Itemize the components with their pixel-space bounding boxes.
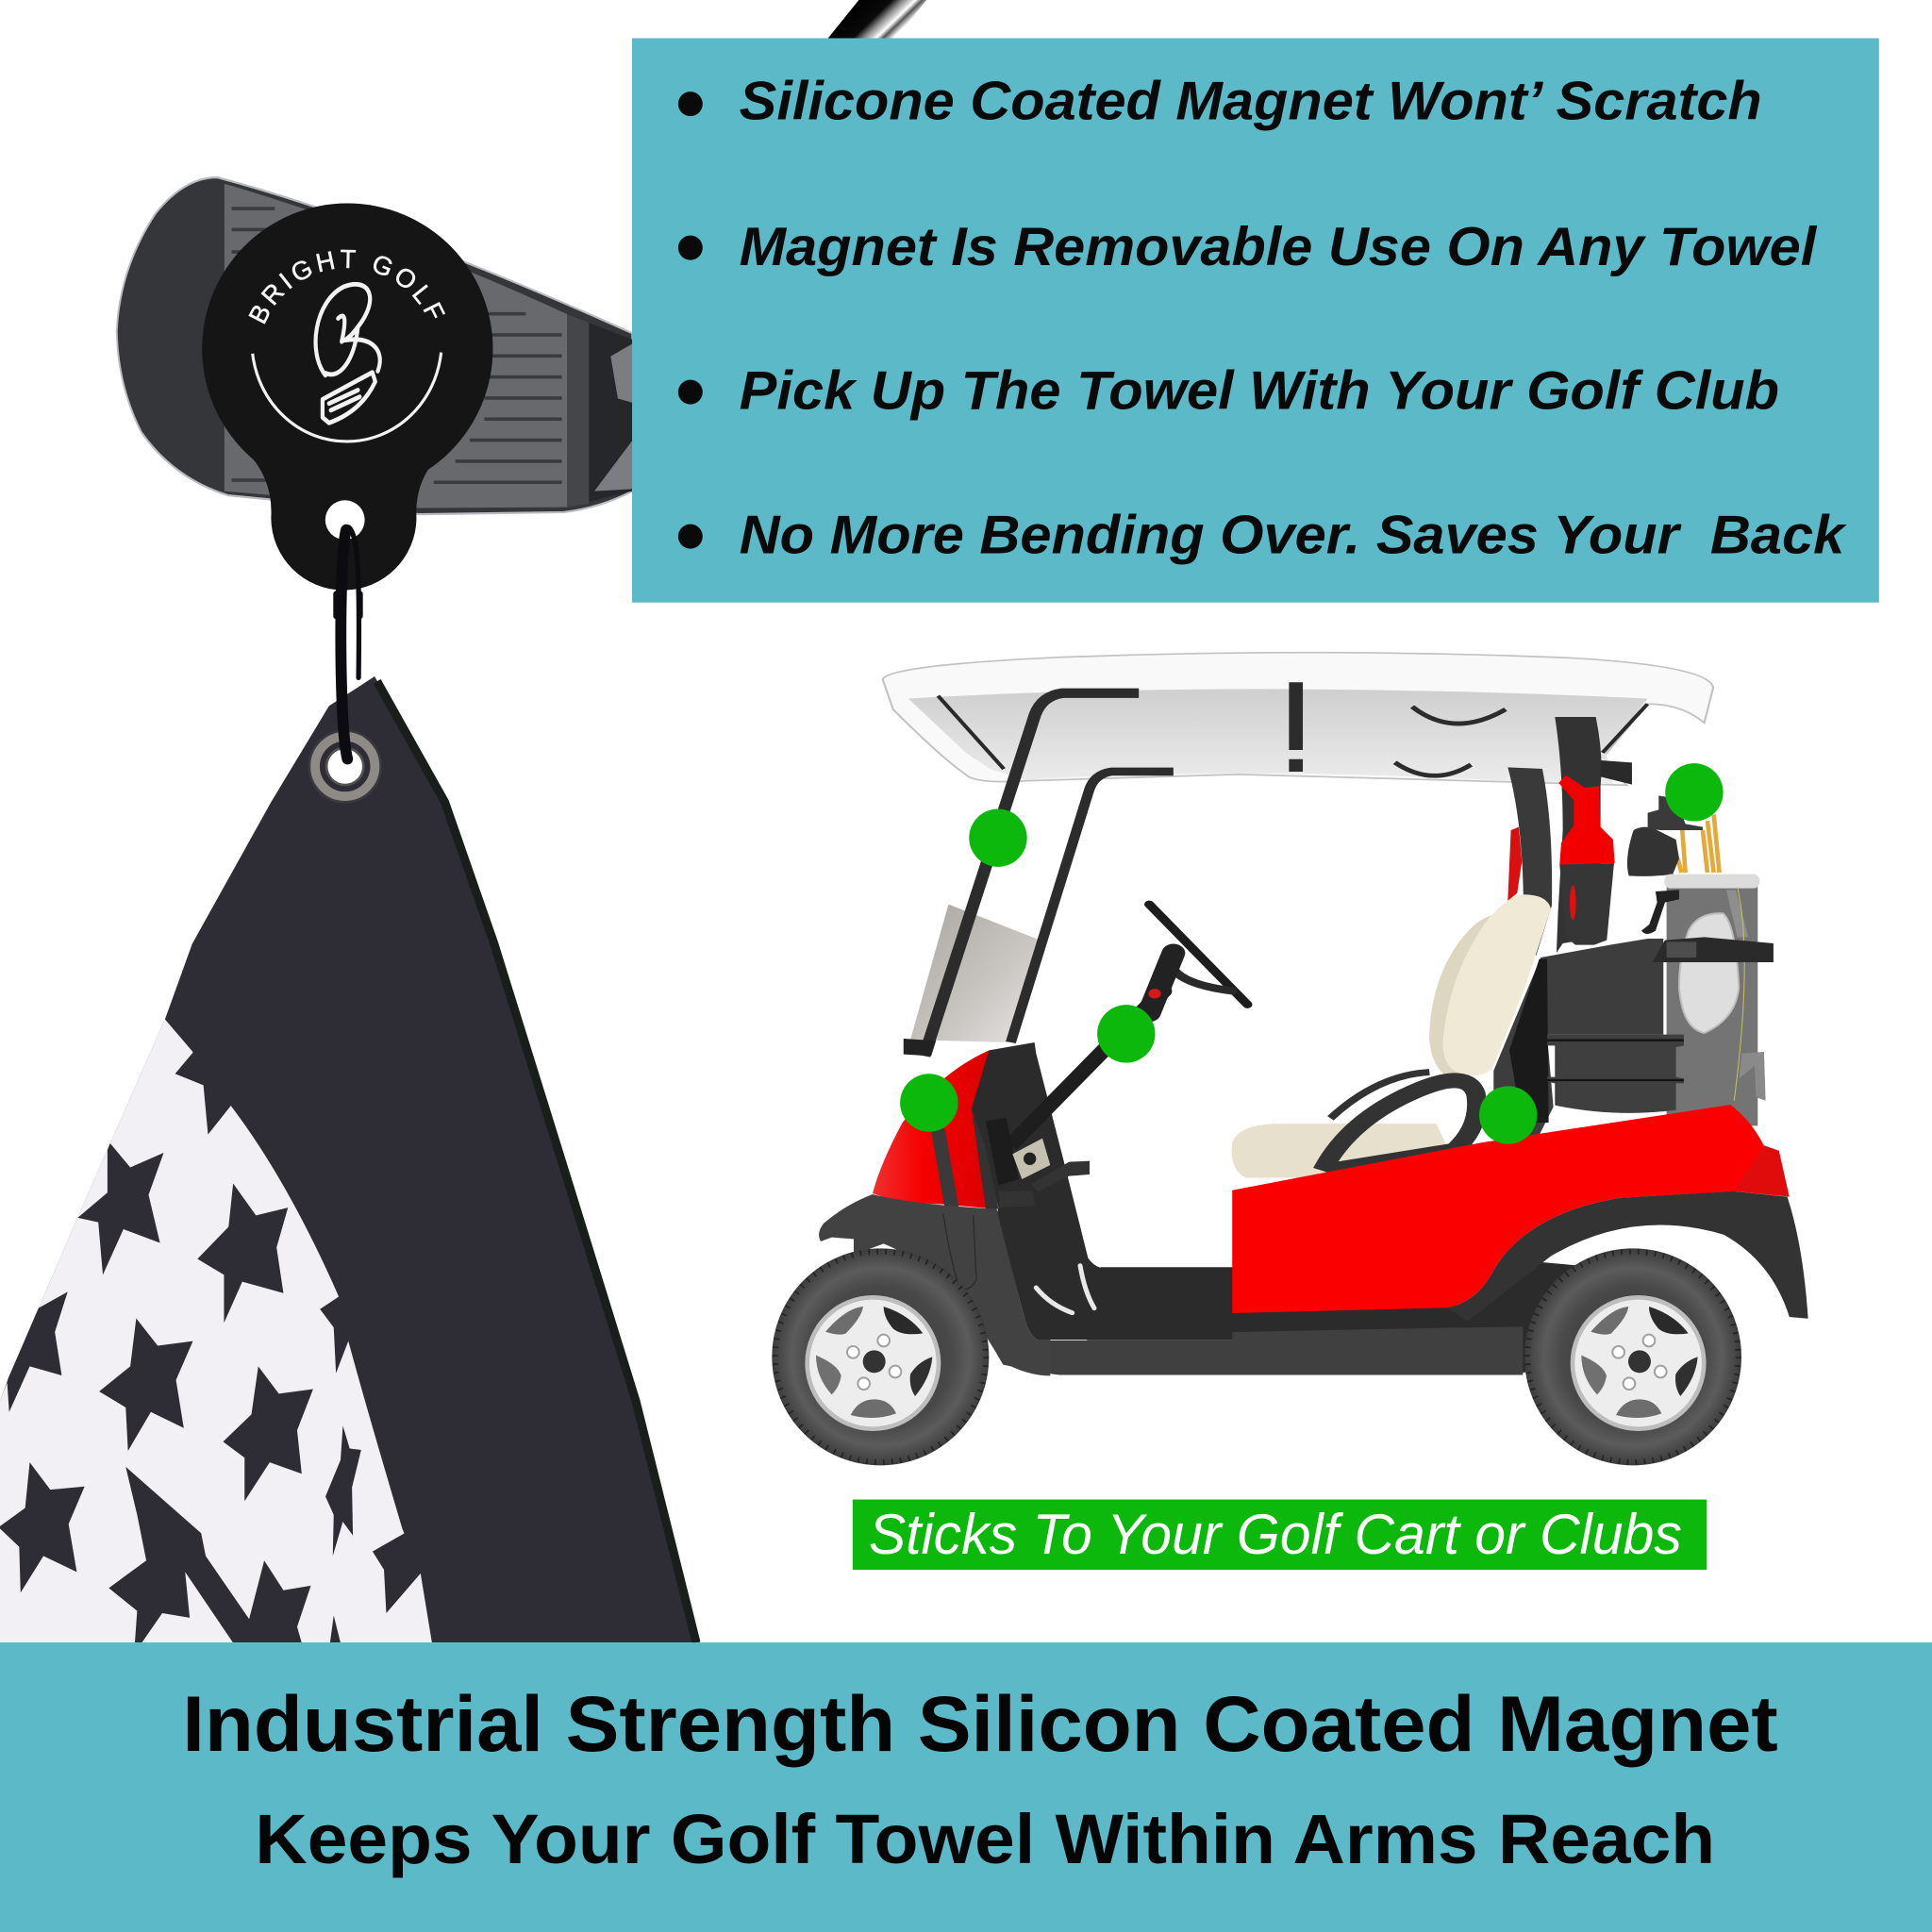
panel: features bbox=[632, 38, 1879, 603]
feature list: Silicone Coated Magnet Wont’ Scratch bbox=[740, 72, 1762, 132]
grommet bbox=[309, 731, 381, 802]
cup holder bbox=[998, 1161, 1090, 1208]
front A-pillars bbox=[924, 693, 1174, 1056]
rear section: pillars, sprayer, bag, box, seat back bbox=[1429, 717, 1774, 1139]
seat back bbox=[1429, 894, 1551, 1075]
magnet medallion bbox=[202, 204, 492, 591]
golf club head bbox=[117, 177, 632, 514]
seat base, armrest and body bbox=[904, 693, 1808, 1374]
feature list bbox=[676, 72, 1847, 565]
steering wheel bbox=[1108, 905, 1247, 1048]
feature list: ● bbox=[676, 515, 705, 553]
pedals bbox=[1036, 1266, 1094, 1313]
golf cart illustration bbox=[772, 653, 1808, 1465]
chassis floor bbox=[1087, 1267, 1240, 1341]
rear fender bbox=[1447, 1191, 1808, 1322]
feature list: Magnet Is Removable Use On Any Towel bbox=[740, 217, 1817, 277]
headline line 1: Industrial Strength Silicon Coated Magnet bbox=[182, 1679, 1778, 1768]
feature list: ● bbox=[676, 227, 705, 265]
logo ring bbox=[253, 353, 441, 441]
wheels bbox=[772, 1248, 1741, 1465]
feature list: ● bbox=[676, 83, 705, 121]
golf bag bbox=[1641, 874, 1766, 1125]
logo script B and club bbox=[316, 284, 380, 423]
magnet placement dots bbox=[900, 763, 1724, 1144]
headline line 2: Keeps Your Golf Towel Within Arms Reach bbox=[255, 1800, 1715, 1878]
feature list: ● bbox=[676, 371, 705, 408]
towel bbox=[0, 676, 700, 1642]
towel star print bbox=[0, 1019, 434, 1642]
armrest bbox=[1323, 1073, 1476, 1171]
steering column bbox=[1011, 1047, 1107, 1144]
carabiner clip bbox=[337, 527, 359, 759]
feature list: No More Bending Over. Saves Your Back bbox=[740, 505, 1847, 565]
feature list: Pick Up The Towel With Your Golf Club bbox=[740, 361, 1779, 422]
front fender bbox=[819, 1194, 1050, 1375]
rear wheel bbox=[1524, 1248, 1741, 1465]
brand arc text: BRIGHT GOLF bbox=[248, 249, 445, 325]
front section: nose, dash, fender bbox=[819, 1042, 1151, 1375]
red body panel bbox=[1232, 1105, 1790, 1313]
green caption: Sticks To Your Golf Cart or Clubs bbox=[869, 1503, 1682, 1566]
panel: bottom headline bbox=[0, 1642, 1932, 1932]
front wheel bbox=[772, 1248, 989, 1465]
golf clubs bbox=[1627, 795, 1720, 876]
rear storage box bbox=[1493, 937, 1774, 1139]
switch plate bbox=[1012, 1139, 1050, 1179]
golf club shaft bbox=[828, 0, 926, 38]
cart roof and windshield bbox=[883, 653, 1713, 1042]
